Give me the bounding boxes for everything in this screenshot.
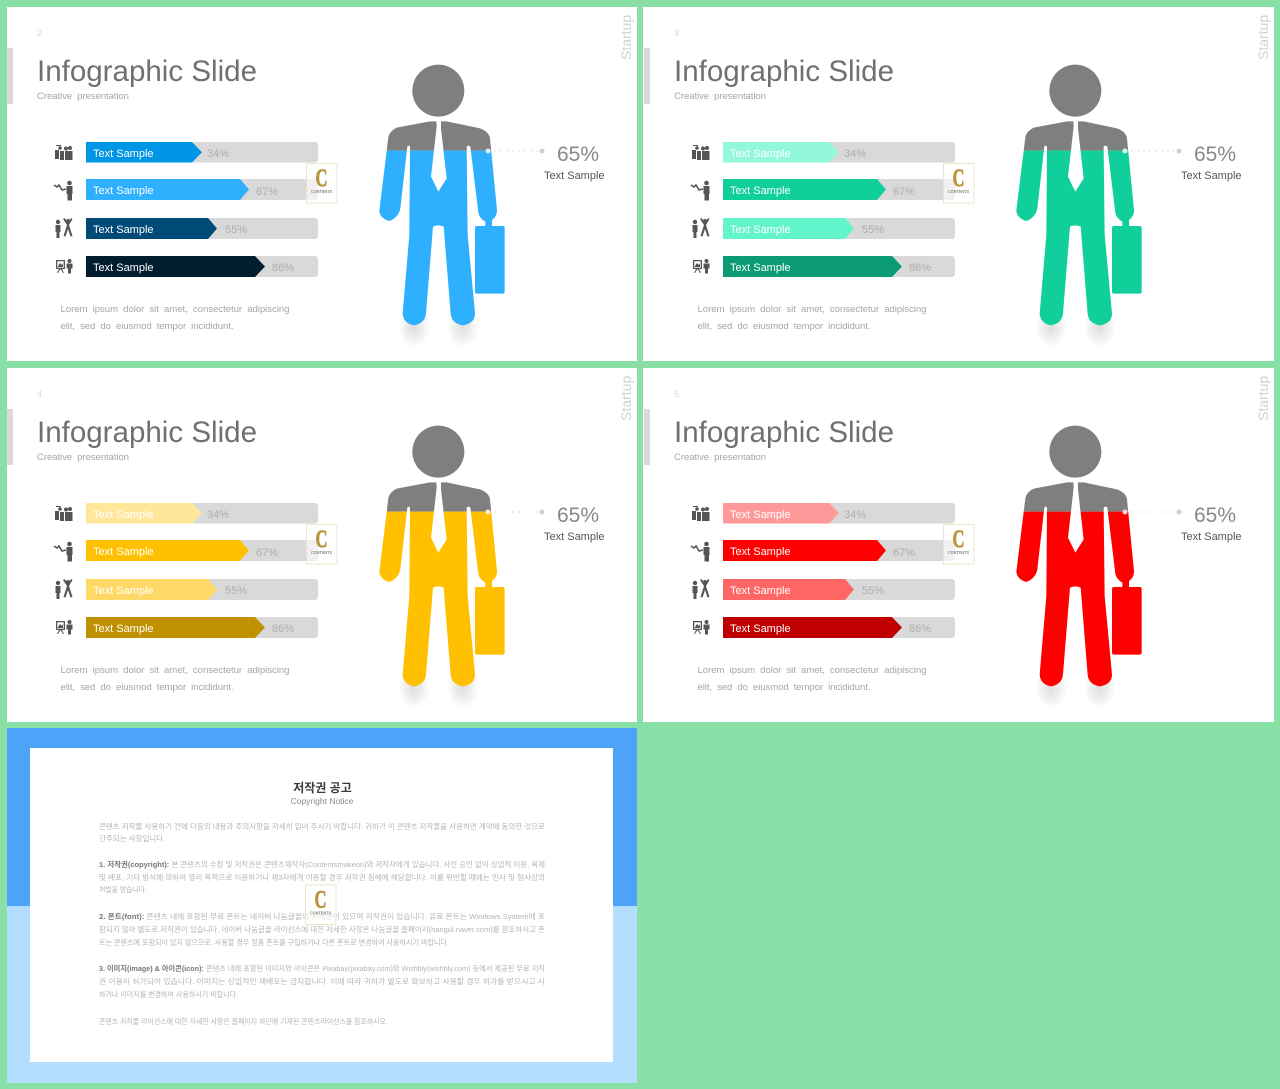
- side label: Startup: [1255, 376, 1271, 421]
- bar row 1: Text Sample: [93, 509, 154, 521]
- bar row 4: 86%: [909, 623, 931, 635]
- bar row 4: 86%: [272, 623, 294, 635]
- body text: Lorem ipsum dolor sit amet, consectetur adipiscing: [60, 304, 290, 315]
- watermark logo: C: [952, 165, 964, 192]
- bar row 2: 67%: [256, 186, 278, 198]
- subtitle: Creative presentation: [674, 452, 766, 463]
- body text: [60, 665, 290, 693]
- notice section 1: 1. 저작권(copyright): 본 콘텐츠의 수정 및 저작권은 콘텐츠제작자(Contentsmakeon)와 저작자에게 있습니다. 사전 승인 없이 상업적 이용, 복제: [99, 859, 545, 869]
- callout 65%: [1122, 504, 1242, 543]
- notice section 2: 트는 콘텐츠에 포함되어 있지 않으므로, 사용할 경우 정품 폰트를 구입하거나 다른 폰트로 변경하여 사용하시기 바랍니다.: [99, 937, 449, 947]
- body text: Lorem ipsum dolor sit amet, consectetur adipiscing: [698, 304, 926, 315]
- bar row 3: Text Sample: [730, 585, 791, 597]
- notice intro: [99, 821, 545, 843]
- bar row 1: 34%: [844, 509, 866, 521]
- page number: 4: [37, 389, 42, 399]
- notice intro: 간주되는 사항입니다.: [99, 833, 165, 843]
- bar row 3: 55%: [862, 224, 884, 236]
- bar row 4: Text Sample: [93, 623, 154, 635]
- bar row 4: [56, 256, 318, 277]
- body text: elit, sed do eiusmod tempor incididunt.: [60, 682, 234, 693]
- bar row 1: 34%: [844, 148, 866, 160]
- bar row 1: [55, 503, 318, 524]
- panel: copyright notice: [7, 728, 637, 1083]
- bar row 1: Text Sample: [93, 148, 154, 160]
- watermark logo: [306, 164, 337, 203]
- notice section 1: 처벌을 받습니다.: [99, 884, 147, 894]
- notice section 1: 및 배포, 기타 방식에 의하여 영리 목적으로 이용하거나 제3자에게 이용할 경우 저작권 침해에 해당합니다. 이를 위반할 때에는 민사 및 형사상의: [99, 872, 545, 882]
- subtitle: Creative presentation: [674, 91, 766, 102]
- bar row 2: 67%: [893, 547, 915, 559]
- bar row 2: 67%: [256, 547, 278, 559]
- bar row 4: [693, 256, 955, 277]
- bar row 1: [692, 503, 955, 524]
- bar row 3: 55%: [862, 585, 884, 597]
- notice section 3: 하거나 이미지를 변경하여 사용하시기 바랍니다.: [99, 989, 238, 999]
- subtitle: Creative presentation: [37, 91, 129, 102]
- watermark logo: CONTENTS: [311, 550, 332, 555]
- accent strip: [7, 48, 13, 104]
- bar row 2: [54, 179, 318, 200]
- bar row 4: Text Sample: [730, 262, 791, 274]
- watermark logo: C: [314, 886, 326, 914]
- callout 65%: [1122, 143, 1242, 182]
- accent strip: [7, 409, 13, 465]
- bar row 3: Text Sample: [93, 224, 154, 236]
- person figure with fill level: [1016, 65, 1142, 347]
- page number: 2: [37, 28, 42, 38]
- side label: Startup: [1255, 15, 1271, 60]
- bar row 2: Text Sample: [93, 185, 154, 197]
- watermark logo: CONTENTS: [948, 189, 969, 194]
- body text: elit, sed do eiusmod tempor incididunt.: [698, 682, 870, 693]
- notice closing line: 콘텐츠 저작물 라이선스에 대한 자세한 사항은 홈페이지 하단에 기재된 콘텐츠라이선스를 참조하시오: [99, 1016, 386, 1026]
- bars and content: [691, 426, 1242, 708]
- bar row 1: Text Sample: [730, 148, 791, 160]
- watermark logo: CONTENTS: [948, 550, 969, 555]
- bar row 4: [56, 617, 318, 638]
- body text: Lorem ipsum dolor sit amet, consectetur adipiscing: [698, 665, 926, 676]
- bar row 2: [54, 540, 318, 562]
- accent strip: [644, 48, 650, 104]
- panel: slide 4 yellow: [7, 368, 637, 722]
- panel: slide 5 red: [643, 368, 1274, 722]
- bars and content: [691, 65, 1242, 347]
- callout 65%: 65%: [1194, 143, 1236, 166]
- bar row 3: 55%: [225, 224, 247, 236]
- bar row 1: 34%: [207, 509, 229, 521]
- person figure with fill level: [1016, 426, 1142, 708]
- notice section 2: [99, 911, 545, 947]
- notice section 3: 권 이용이 허가되어 있습니다. 이미지는 상업적인 재배포는 금지합니다. 이에 따라 귀하가 별도로 확보하고 사용할 경우 허가를 받으시고 사: [99, 976, 545, 986]
- callout 65%: 65%: [557, 143, 599, 166]
- body text: [698, 665, 926, 693]
- page number: 3: [674, 28, 679, 38]
- subtitle: Creative presentation: [37, 452, 129, 463]
- notice section 2: 2. 폰트(font): 콘텐츠 내에 포함된 무료 폰트는 네이버 나눔글꼴의 저작권이 있으며 저작권이 있습니다. 유료 폰트는 Windows System에 포: [99, 911, 545, 921]
- title: Infographic Slide: [674, 416, 894, 449]
- notice section 2: 함되지 않아 별도로 저작권이 있습니다. 네이버 나눔글꼴 라이선스에 대한 자세한 사항은 나눔글꼴 홈페이지(hangul.naver.com)를 참조하시고 폰: [99, 924, 545, 934]
- notice title: 저작권 공고: [293, 780, 352, 795]
- bar row 2: Text Sample: [730, 185, 791, 197]
- person figure with fill level: [379, 65, 505, 347]
- callout 65%: 65%: [1194, 504, 1236, 527]
- callout 65%: [486, 504, 605, 543]
- panel: slide 2 blue: [7, 7, 637, 361]
- panel: slide 3 green: [643, 7, 1274, 361]
- callout 65%: Text Sample: [544, 170, 605, 182]
- bar row 1: Text Sample: [730, 509, 791, 521]
- watermark logo: [944, 164, 974, 203]
- callout 65%: Text Sample: [1181, 170, 1242, 182]
- callout 65%: Text Sample: [1181, 531, 1242, 543]
- watermark logo: CONTENTS: [310, 910, 331, 916]
- notice section 3: 3. 이미지(image) & 아이콘(icon): 콘텐츠 내에 포함된 이미지와 아이콘은 Pixabay(pixabay.com)와 Wishbly(wishbly.com) 등에서 제공된 무료 저작: [99, 963, 545, 973]
- watermark logo: [306, 524, 337, 564]
- body text: elit, sed do eiusmod tempor incididunt.: [60, 321, 234, 332]
- side label: Startup: [618, 15, 634, 60]
- bar row 2: [691, 179, 955, 200]
- accent strip: [644, 409, 650, 465]
- body text: Lorem ipsum dolor sit amet, consectetur adipiscing: [60, 665, 290, 676]
- callout 65%: [486, 143, 605, 182]
- notice intro: 콘텐츠 저작물 사용하기 전에 다음의 내용과 주의사항을 자세히 읽어 주시기 바랍니다. 귀하가 이 콘텐츠 저작물을 사용하면 계약에 동의한 것으로: [99, 821, 545, 831]
- notice subtitle: Copyright Notice: [291, 796, 354, 806]
- notice section 1: [99, 859, 545, 894]
- title: Infographic Slide: [674, 55, 894, 88]
- bar row 3: Text Sample: [93, 585, 154, 597]
- title: Infographic Slide: [37, 416, 257, 449]
- bar row 3: [692, 218, 955, 239]
- side label: Startup: [618, 376, 634, 421]
- bar row 2: [691, 540, 955, 562]
- watermark logo: C: [316, 165, 328, 192]
- bar row 4: Text Sample: [93, 262, 154, 274]
- callout 65%: Text Sample: [544, 531, 605, 543]
- bar row 4: 86%: [272, 262, 294, 274]
- bar row 3: Text Sample: [730, 224, 791, 236]
- bar row 4: Text Sample: [730, 623, 791, 635]
- body text: [698, 304, 926, 332]
- bar row 3: [692, 579, 955, 600]
- body text: elit, sed do eiusmod tempor incididunt.: [698, 321, 870, 332]
- bar row 3: [56, 218, 318, 239]
- person figure with fill level: [379, 426, 505, 708]
- callout 65%: 65%: [557, 504, 599, 527]
- bar row 2: Text Sample: [730, 546, 791, 558]
- bar row 1: [692, 142, 955, 162]
- bars and content: [54, 426, 605, 708]
- watermark logo: C: [316, 526, 328, 553]
- bar row 1: [55, 142, 318, 162]
- watermark logo: CONTENTS: [311, 189, 332, 194]
- bar row 4: 86%: [909, 262, 931, 274]
- bar row 3: 55%: [225, 585, 247, 597]
- bar row 4: [693, 617, 955, 638]
- bar row 2: Text Sample: [93, 546, 154, 558]
- title: Infographic Slide: [37, 55, 257, 88]
- body text: [60, 304, 290, 332]
- watermark logo: [306, 885, 336, 924]
- watermark logo: C: [952, 526, 964, 553]
- notice section 3: [99, 963, 545, 999]
- bar row 3: [56, 579, 318, 600]
- bar row 2: 67%: [893, 186, 915, 198]
- page number: 5: [674, 389, 679, 399]
- watermark logo: [944, 524, 974, 564]
- bar row 1: 34%: [207, 148, 229, 160]
